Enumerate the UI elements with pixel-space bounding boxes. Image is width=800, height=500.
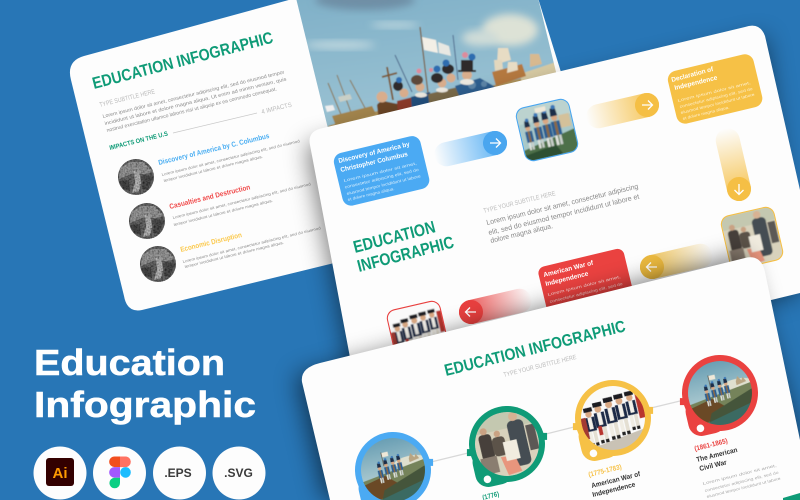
step card: war of independence — [537, 247, 635, 321]
connector line — [431, 401, 680, 462]
event text: war of independence — [588, 464, 642, 499]
step card: declaration: consectetur adipiscing elit, sed do — [679, 86, 754, 109]
subtitle: TYPE YOUR SUBTITLE HERE — [483, 190, 557, 215]
event text: civil war: eiusmod tempor incididunt ut labore — [706, 476, 782, 499]
badge: Figma — [93, 446, 146, 500]
impact item: casualties: Lorem ipsum dolor sit amet, consectetur adipiscing elit, sed do eiusmod — [172, 181, 311, 220]
step card: declaration: Independence — [674, 74, 718, 92]
bottom accent strip — [783, 493, 800, 500]
badge: SVG — [212, 446, 266, 500]
heading: education infographic — [351, 217, 456, 276]
subtitle: TYPE YOUR SUBTITLE HERE — [503, 354, 578, 379]
image: declaration scene — [720, 206, 784, 264]
step card: war of independence: American War of — [543, 260, 595, 279]
paragraph: dolore magna aliqua. — [489, 221, 554, 245]
intro paragraph: incididunt ut labore et dolore magna aliqua. Ut enim ad minim veniam, quis — [104, 76, 288, 127]
title: EDUCATION INFOGRAPHIC — [90, 29, 275, 93]
impact item: economic: Economic Disruption — [179, 230, 243, 254]
arrow: blue right — [432, 129, 509, 169]
section heading: impacts: IMPACTS ON THE U.S — [109, 130, 169, 152]
main heading: Infographic — [34, 384, 256, 425]
step card: discovery: et dolore magna aliqua. — [347, 186, 395, 202]
step card: discovery: Lorem ipsum dolor sit amet, — [343, 161, 417, 183]
step card: war of independence: Lorem ipsum dolor sit amet, — [547, 274, 621, 297]
event text: civil war: The American — [696, 447, 738, 464]
panel: timeline slide — [310, 26, 800, 356]
panel: pins slide — [302, 257, 800, 500]
slide card — [302, 257, 800, 500]
impact item: economic — [140, 225, 321, 282]
image: soldiers — [386, 300, 446, 345]
impact item: casualties: Casualties and Destruction — [168, 182, 251, 211]
main heading: Education — [34, 342, 225, 383]
impact item: economic: Lorem ipsum dolor sit amet, consectetur adipiscing elit, sed do eiusmod — [182, 225, 321, 264]
shadow under timeline slide — [306, 36, 800, 410]
arrow: yellow right — [584, 91, 661, 131]
impact item: casualties: tempor incididunt ut labore et dolore magna aliqua. — [173, 198, 273, 227]
event text: civil war: consectetur adipiscing elit, sed do — [704, 469, 780, 493]
intro paragraph — [102, 69, 288, 134]
paragraph: Lorem ipsum dolor sit amet, consectetur adipiscing — [485, 182, 639, 227]
event text: civil war: Civil War — [699, 459, 728, 473]
step card: discovery — [332, 134, 431, 208]
panel: impacts slide — [70, 0, 600, 310]
event text: war of independence: (1775-1783) — [588, 464, 622, 479]
event text: war of independence: Independence — [592, 481, 636, 499]
impact item: casualties — [129, 181, 311, 239]
step card: declaration: et dolore magna aliqua. — [682, 105, 730, 121]
event text: civil war — [694, 438, 782, 499]
step card: discovery: Discovery of America by — [338, 141, 411, 165]
pin: blue — [355, 432, 434, 500]
slide card — [310, 26, 800, 400]
event text: civil war: Lorem ipsum dolor sit amet, — [702, 463, 777, 486]
impact item: Columbus: tempor incididunt ut labore et dolore magna aliqua. — [163, 154, 263, 183]
subtitle: TYPE SUBTITLE HERE — [99, 88, 156, 109]
pin: red — [680, 355, 758, 436]
step card: war of independence: Independence — [545, 270, 589, 288]
arrow: red left — [457, 286, 534, 326]
badge: Adobe Illustrator: Ai — [52, 465, 68, 482]
impact item: Columbus — [118, 131, 300, 195]
step card: declaration: Lorem ipsum dolor sit amet, — [677, 80, 751, 103]
impact item: economic: tempor incididunt ut labore et dolore magna aliqua. — [184, 240, 284, 269]
heading: education infographic: EDUCATION — [351, 217, 437, 257]
heading: education infographic: INFOGRAPHIC — [355, 233, 456, 276]
event text: civil war: (1861-1865) — [694, 438, 728, 453]
arrow: yellow down — [713, 126, 753, 203]
step card: declaration — [666, 52, 764, 126]
badge: SVG: .SVG — [224, 466, 253, 480]
main heading — [34, 342, 256, 425]
impacts count: 4 IMPACTS — [261, 102, 293, 116]
step card: war of independence: consectetur adipiscing elit, sed do — [549, 281, 624, 304]
shadow under pins slide — [296, 254, 800, 500]
step card: declaration: Declaration of — [671, 66, 715, 84]
impact item: Columbus: Lorem ipsum dolor sit amet, consectetur adipiscing elit, sed do eiusmod — [161, 138, 300, 177]
event text: war of independence: American War of — [591, 471, 642, 490]
title: EDUCATION INFOGRAPHIC — [443, 317, 628, 380]
painting: fleet and soldiers — [296, 0, 556, 127]
pin: yellow — [572, 380, 654, 461]
badge: EPS — [153, 446, 206, 500]
badge: EPS: .EPS — [164, 466, 192, 480]
arrow: yellow left — [638, 241, 715, 281]
paragraph: elit, sed do eiusmod tempor incididunt ut labore et — [487, 192, 640, 237]
step card: declaration: eiusmod tempor incididunt ut labore — [680, 92, 756, 115]
impact item: Columbus: Discovery of America by C. Columbus — [157, 131, 270, 167]
step card: discovery: Christopher Columbus — [340, 151, 409, 174]
slide card — [70, 0, 600, 310]
intro paragraph: nostrud exercitation ullamco laboris nisi ut aliquip ex ea commodo consequat. — [106, 86, 277, 134]
badge: Adobe Illustrator — [34, 446, 86, 500]
pin: green — [466, 406, 548, 487]
intro paragraph: Lorem ipsum dolor sit amet, consectetur adipiscing elit, sed do eiusmod tempor — [102, 69, 285, 120]
image: first landing — [515, 98, 579, 162]
step card: discovery: consectetur adipiscing elit, sed do — [344, 167, 420, 189]
step card: discovery: eiusmod tempor incididunt ut labore — [346, 173, 422, 196]
